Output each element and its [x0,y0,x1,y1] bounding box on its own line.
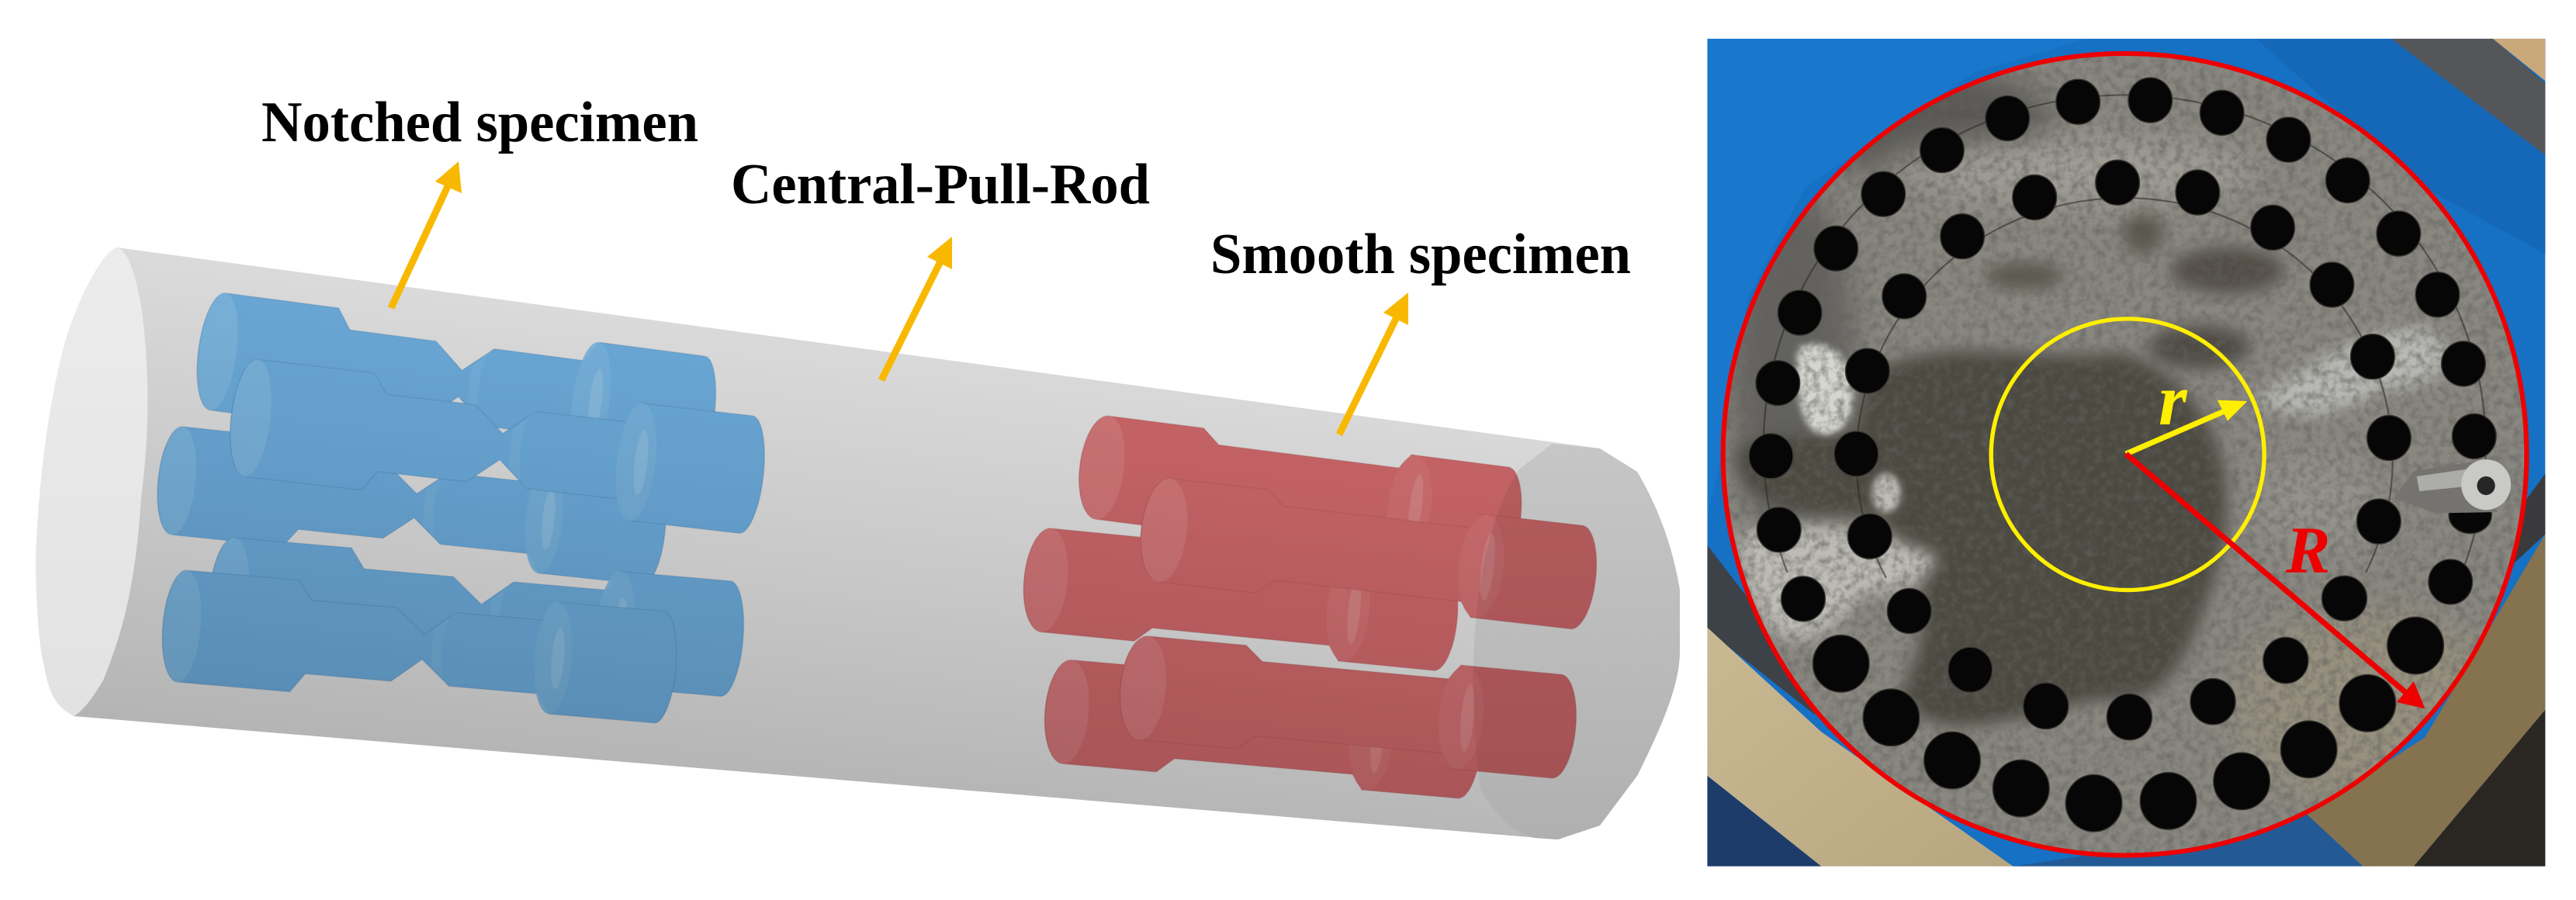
photo background [1707,39,2545,867]
label: central pull rod: Central-Pull-Rod [731,153,1150,216]
rod right end face [1473,444,1680,839]
notched specimens [153,291,770,725]
arrow: notched specimen [391,161,462,308]
label: R: R [2285,513,2330,587]
arrow: radius R [2126,454,2425,708]
rod left end face [36,248,147,716]
yellow inner circle r [1991,319,2264,590]
central pull rod body [74,248,1600,839]
outer ring holes [1749,78,2496,832]
smooth specimens [1019,414,1601,800]
label: r: r [2159,360,2188,441]
steel disk [1714,45,2538,864]
red outer circle R [1723,54,2526,855]
arrow: central pull rod [881,237,952,380]
inner ring holes [1834,160,2411,740]
arrow: smooth specimen [1339,292,1408,434]
arrow: radius r [2126,400,2247,454]
inserted specimen [2394,459,2511,513]
panel: disk photo [1707,39,2545,867]
label: notched specimen: Notched specimen [261,91,698,154]
label: smooth specimen: Smooth specimen [1210,223,1631,286]
panel: cylinder with specimens [36,248,1680,839]
crack lines between holes [1764,95,2486,573]
